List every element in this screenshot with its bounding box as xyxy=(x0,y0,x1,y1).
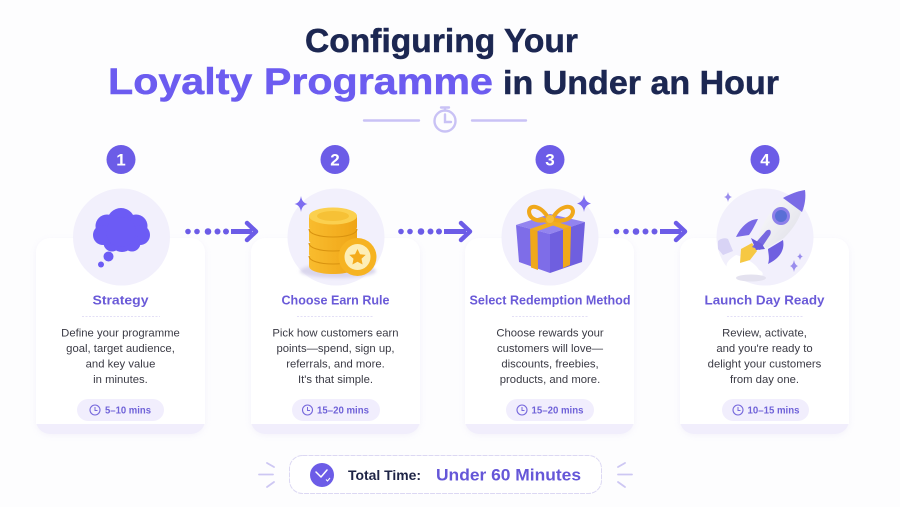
title: Configuring Your xyxy=(305,22,578,59)
card 2 text: referrals, and more. xyxy=(286,358,385,370)
card 2 text xyxy=(272,328,399,386)
panel: card 2 choose earn rule xyxy=(251,238,420,435)
card 4 time pill xyxy=(722,399,809,421)
card 3 text xyxy=(496,328,604,386)
card 4 text: from day one. xyxy=(730,374,799,386)
card 1 text xyxy=(61,328,180,386)
card 3 heading: Select Redemption Method xyxy=(470,292,631,308)
number badge 1: 1 xyxy=(116,150,126,170)
arrow 3 to 4 xyxy=(614,223,685,240)
card 4 time pill: 10–15 mins xyxy=(748,406,800,416)
panel: card 3 select redemption method xyxy=(465,238,634,435)
number badge 1 xyxy=(106,145,136,174)
card 4 text: delight your customers xyxy=(708,358,822,370)
card 3 text: customers will love— xyxy=(497,343,604,355)
card 2 text: It's that simple. xyxy=(298,374,373,386)
card 4 text: Review, activate, xyxy=(722,328,807,340)
number badge 4 xyxy=(750,145,780,174)
total time bar xyxy=(290,456,602,494)
card 1 text: and key value xyxy=(86,358,155,370)
card 2 text: Pick how customers earn xyxy=(272,328,399,340)
card 3 text: products, and more. xyxy=(500,374,600,386)
card 1 text: Define your programme xyxy=(61,328,180,340)
number badge 3 xyxy=(536,145,564,174)
card 2 text: points—spend, sign up, xyxy=(276,343,395,355)
total time value: Under 60 Minutes xyxy=(436,466,581,484)
panel: card 1 strategy xyxy=(36,238,205,435)
number badge 2: 2 xyxy=(330,150,340,170)
card 1 time pill xyxy=(77,399,164,421)
arrow 2 to 3 xyxy=(398,223,470,240)
card 2 time pill xyxy=(292,399,380,421)
title: in Under an Hour xyxy=(503,64,779,101)
number badge 4: 4 xyxy=(760,150,770,170)
icon: stopwatch divider xyxy=(364,108,526,132)
card 3 time pill xyxy=(506,399,594,421)
icon: rocket xyxy=(716,188,814,286)
total time label: Total Time: xyxy=(348,468,421,483)
card 3 text: discounts, freebies, xyxy=(501,358,599,370)
card 1 text: in minutes. xyxy=(93,374,148,386)
icon: check clock xyxy=(310,463,334,487)
card 3 time pill: 15–20 mins xyxy=(532,406,584,416)
card 1 text: goal, target audience, xyxy=(66,343,175,355)
arrow 1 to 2 xyxy=(185,223,256,240)
card 3 text: Choose rewards your xyxy=(496,328,604,340)
decorative burst left xyxy=(259,463,274,487)
title xyxy=(108,22,779,102)
card 4 text: and you're ready to xyxy=(716,343,813,355)
card 1 heading: Strategy xyxy=(92,292,149,308)
card 2 time pill: 15–20 mins xyxy=(317,406,369,416)
icon: coin stack xyxy=(288,188,384,286)
number badge 2 xyxy=(320,145,350,174)
number badge 3: 3 xyxy=(545,150,555,170)
icon: gift box xyxy=(502,188,598,286)
icon: thought cloud xyxy=(73,188,170,286)
card 1 time pill: 5–10 mins xyxy=(105,406,151,416)
card 2 heading: Choose Earn Rule xyxy=(282,292,390,308)
title: Loyalty Programme xyxy=(108,61,493,102)
panel: card 4 launch day ready xyxy=(680,238,849,435)
card 4 heading: Launch Day Ready xyxy=(704,292,825,308)
decorative burst right xyxy=(618,463,632,487)
card 4 text xyxy=(708,328,822,386)
